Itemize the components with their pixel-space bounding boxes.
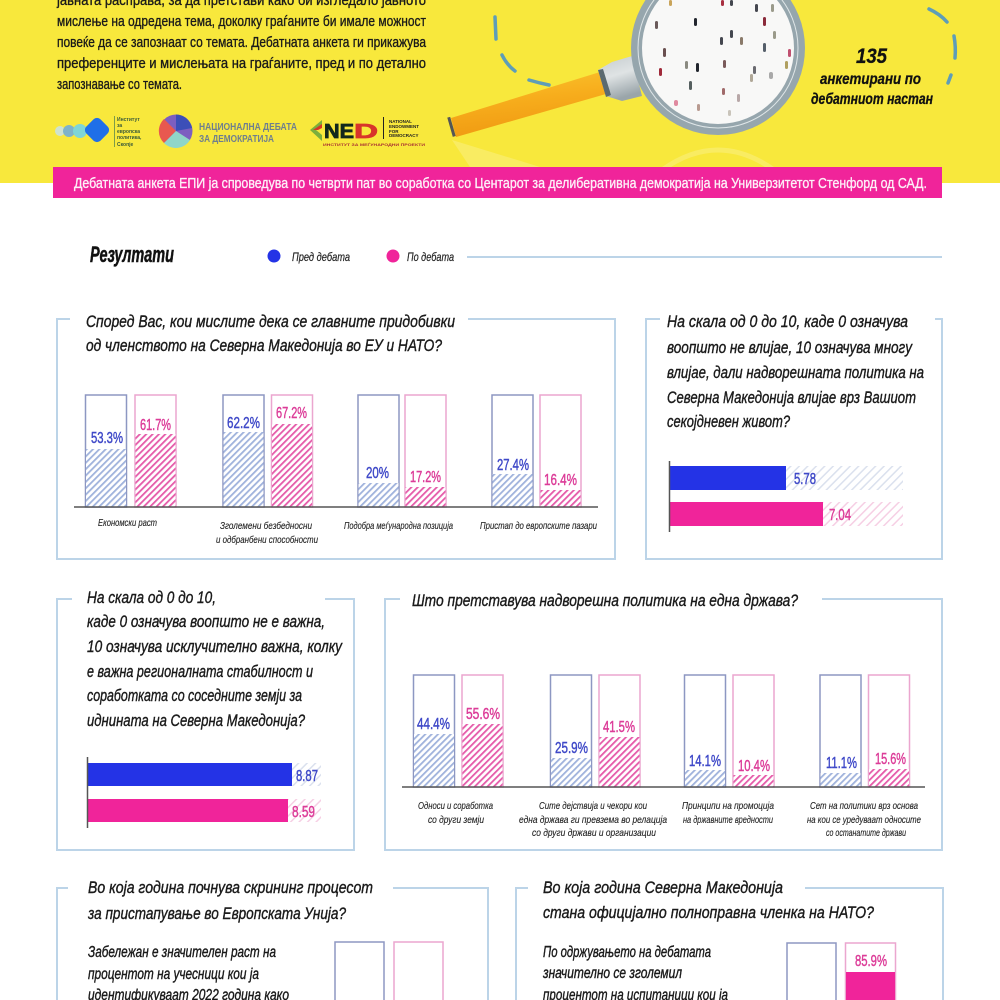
question: стана официјално полноправна членка на НАТО? [543,903,874,922]
intro text block: повеќе да се запознаат со темата. Дебатната анкета ги прикажува [57,34,427,51]
question: Во која година Северна Македонија [543,878,783,897]
question: соработката со соседните земји за [87,686,302,705]
logo: national debate for democracy: НАЦИОНАЛНА ДЕБАТА [199,122,297,133]
bar chart: 17.2% [410,469,441,486]
panel: what is foreign policy [385,591,942,850]
bar chart: со останатите држави [826,827,906,839]
respondents count: анкетирани по [820,71,921,88]
logo: NED: ENDOWMENT [389,124,419,129]
logo: NED: DEMOCRACY [389,133,419,138]
respondents count [811,45,933,108]
logo: NED: ИНСТИТУТ ЗА МЕЃУНАРОДНИ ПРОЕКТИ [323,142,425,147]
intro text block: запознавање со темата. [57,76,182,93]
bar chart: 44.4% [417,716,450,733]
bar chart: Сите дејствија и чекори кои [539,800,647,812]
bar chart: Сет на политики врз основа [810,800,918,812]
bar chart: 10.4% [738,758,770,775]
question: иднината на Северна Македонија? [87,711,305,730]
bar chart [670,461,903,532]
bar chart: 14.1% [689,753,721,770]
panel: regional stability [57,588,354,850]
logo: institute for European policy: за [117,123,122,129]
question: од членството на Северна Македонија во ЕУ и НАТО? [86,336,442,355]
question: Според Вас, кои мислите дека се главните придобивки [86,312,455,331]
question: за пристапување во Европската Унија? [87,904,346,923]
logo: national debate for democracy: ЗА ДЕМОКРАТИЈА [199,134,274,145]
logo: NED: NE [324,121,354,143]
question [667,312,924,431]
bar chart: 25.9% [555,740,588,757]
bar chart: 41.5% [603,719,635,736]
bar chart: со други земји [428,814,484,826]
bar chart: 5.78 [794,471,816,488]
handle [451,72,606,137]
commentary: процентот на учесници кои ја [88,966,259,983]
respondents count: 135 [856,45,887,68]
panel: EU and NATO benefits [57,312,615,559]
question: каде 0 означува воопшто не е важна, [87,612,325,631]
logo: institute for European policy [55,116,142,148]
bar chart: 20% [366,465,389,482]
bar chart: 8.59 [292,804,315,821]
logo: institute for European policy: Институт [117,117,140,123]
question: Во која година почнува скрининг процесот [88,878,373,897]
bar chart: 53.3% [91,430,123,447]
bar chart: и одбранбени способности [216,534,318,546]
bar chart [74,395,598,546]
icon: magnifying glass with crowd [447,0,955,170]
question: воопшто не влијае, 10 означува многу [667,338,913,357]
question: Северна Македонија влијае врз Вашиот [667,388,916,407]
commentary: По одржувањето на дебатата [543,944,711,961]
dashed circle [495,9,955,85]
question [87,878,373,923]
logo: NED [310,117,425,147]
legend: Пред дебата [292,250,350,264]
panel: EU screening year [57,878,488,1000]
bar chart: на кои се уредуваат односите [807,814,921,826]
logo: national debate for democracy [159,114,297,148]
neck [598,56,642,101]
heading: results: Резултати [90,242,174,267]
bar chart: Зголемени безбедносни [220,520,312,532]
bar chart: на државните вредности [683,814,773,826]
bar chart: 61.7% [140,417,171,434]
intro text block: преференците и мислењата на граѓаните, пред и по детално [57,55,426,72]
commentary [88,944,289,1000]
pink banner [53,167,942,198]
question [87,588,343,730]
bar chart: 16.4% [544,472,577,489]
commentary [542,944,728,1000]
panel: foreign policy influence [646,312,942,559]
bar chart: една држава ги превзема во релација [519,814,667,826]
bar chart: Економски раст [98,517,157,529]
bar chart: Принципи на промоција [682,800,774,812]
question: влијае, дали надворешната политика на [667,363,924,382]
bar chart: 67.2% [276,405,307,422]
bar chart: 8.87 [296,768,318,785]
bar chart: Подобра меѓународна позиција [344,520,453,532]
question: На скала од 0 до 10, каде 0 означува [667,312,908,331]
question [543,878,874,922]
bar chart: 15.6% [875,751,906,768]
bar chart [402,675,925,839]
intro text block: мислење на одредена тема, доколку граѓаните би имале можност [57,13,426,30]
question: секојдневен живот? [667,412,790,431]
logo: institute for European policy: Скопје [117,142,134,148]
bar chart: 62.2% [227,415,260,432]
bar chart: Односи и соработка [418,800,493,812]
legend: По дебата [407,250,454,264]
logo: NED: NATIONAL [389,119,412,124]
bar chart [335,942,443,1000]
bar chart: Пристап до европските пазари [480,520,597,532]
bar chart: 27.4% [497,457,529,474]
commentary: Забележан е значителен раст на [88,944,276,961]
question: е важна регионалната стабилност и [87,662,313,681]
bar chart: со други држави и организации [532,827,656,839]
question: 10 означува исклучително важна, колку [87,637,343,656]
crowd [655,0,791,116]
logo: NED: FOR [389,129,399,134]
question [86,312,455,355]
bar chart: 85.9% [855,953,887,970]
legend [268,250,454,264]
header background [0,0,1000,183]
bar chart [787,943,896,1000]
logo: institute for European policy: европска [117,129,140,135]
bar chart: 7.04 [829,507,851,524]
question: На скала од 0 до 10, [87,588,216,607]
reflection [662,150,774,170]
bar chart [88,757,321,828]
intro text block [56,0,427,93]
question: Што претставува надворешна политика на една држава? [412,591,798,610]
respondents count: дебатниот настан [811,91,933,108]
commentary: значително се зголемил [542,965,682,982]
logo: NED: D [354,121,378,143]
bar chart: 55.6% [466,706,500,723]
logo: institute for European policy: политика, [117,135,142,141]
lens [631,0,805,135]
bar chart: 11.1% [826,755,857,772]
panel: NATO membership year [516,878,943,1000]
